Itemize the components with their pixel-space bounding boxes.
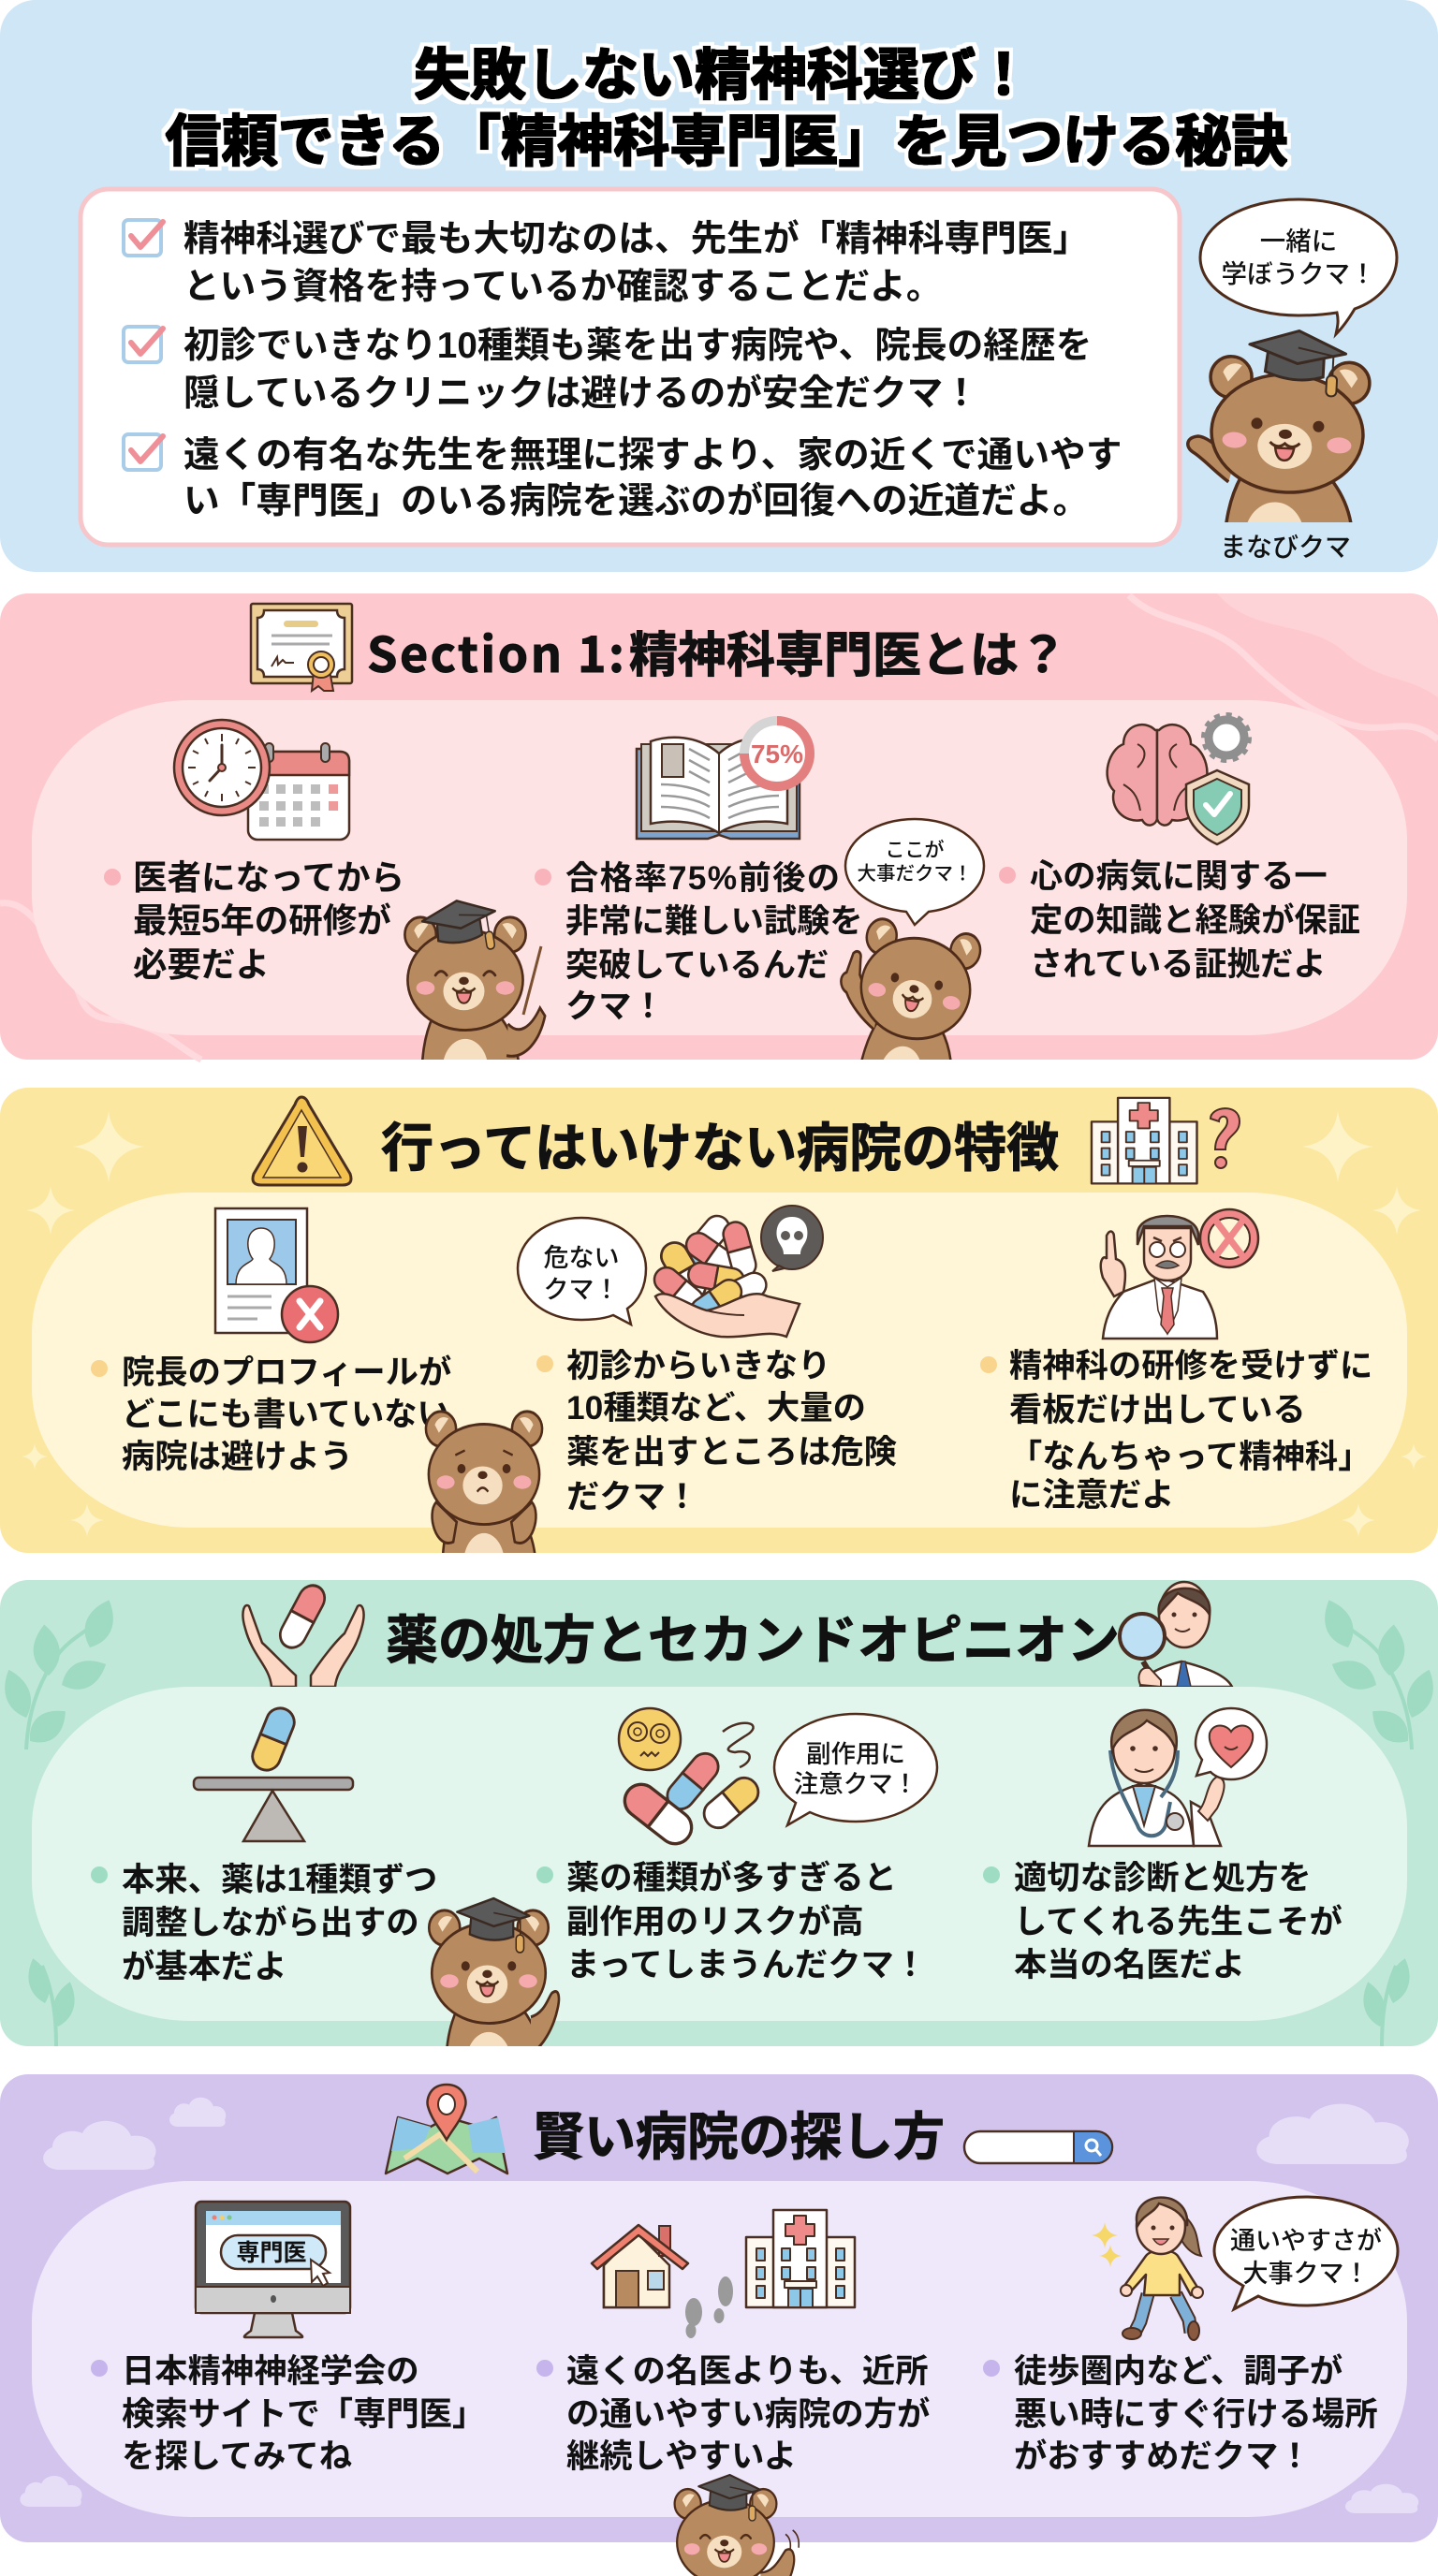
- summary text: [183, 219, 1122, 521]
- text: item 2: 初診からいきなり: [566, 1348, 830, 1384]
- text: item 2: [535, 860, 863, 1025]
- text: item 2: 突破しているんだ: [565, 947, 829, 984]
- text: item 1: 調整しながら出すの: [122, 1905, 419, 1941]
- text: item 2: 薬を出すところは危険: [566, 1434, 897, 1471]
- text: item 3: [983, 2353, 1378, 2475]
- speech bubble: 危ないクマ: クマ！: [543, 1276, 620, 1304]
- text: item 1: 日本精神神経学会の: [122, 2353, 419, 2390]
- text: item 3: 悪い時にすぐ行ける場所: [1014, 2396, 1378, 2433]
- icon: check 1: [124, 220, 163, 256]
- icon: book with 75% ring: [637, 720, 811, 839]
- panel: how to find a hospital: [0, 2074, 1438, 2576]
- text: item 1: [104, 858, 404, 984]
- text: item 3: [999, 858, 1360, 983]
- sparkles: [22, 1111, 1427, 1537]
- text: item 1: 本来、薬は1種類ずつ: [122, 1862, 437, 1898]
- text: item 3: 看板だけ出している: [1009, 1392, 1306, 1428]
- panel: intro: [0, 0, 1438, 578]
- heading: hospitals to avoid: 行ってはいけない病院の特徴: [381, 1119, 1059, 1178]
- icon: hands with capsule: [242, 1581, 364, 1687]
- panel: section 1: [0, 593, 1438, 1062]
- speech bubble: 一緒に学ぼうクマ: 一緒に: [1260, 227, 1337, 256]
- speech bubble: 副作用に注意クマ: [774, 1714, 937, 1825]
- text: item 1: を探してみてね: [122, 2438, 352, 2475]
- icon: profile with x: [215, 1208, 338, 1342]
- text: item 2: 10種類など、大量の: [566, 1390, 866, 1427]
- speech bubble: 危ないクマ: 危ない: [543, 1244, 620, 1272]
- bear name: まなびクマ: [1220, 533, 1351, 562]
- icon: warning: [253, 1097, 351, 1185]
- icon: book with 75% ring: 75%: [751, 739, 803, 768]
- summary text: 初診でいきなり10種類も薬を出す病院や、院長の経歴を: [183, 326, 1092, 366]
- speech bubble: 一緒に学ぼうクマ: [1200, 199, 1397, 334]
- text: item 2: [536, 2353, 930, 2475]
- icon: check 2: [124, 327, 163, 362]
- summary text: 精神科選びで最も大切なのは、先生が「精神科専門医」: [183, 219, 1089, 259]
- icon: dizzy face and pills: [618, 1708, 764, 1851]
- text: item 2: [536, 1348, 897, 1515]
- icon: pills in hand with skull: [650, 1206, 823, 1337]
- text: item 3: 定の知識と経験が保証: [1030, 902, 1360, 939]
- text: item 3: 本当の名医だよ: [1014, 1947, 1245, 1983]
- text: item 2: 合格率75%前後の: [565, 860, 840, 897]
- text: item 3: 「なんちゃって精神科」: [1009, 1439, 1372, 1475]
- text: item 1: 検索サイトで「専門医」: [122, 2396, 485, 2433]
- text: item 3: に注意だよ: [1009, 1477, 1174, 1514]
- icon: doctor and cross: [1101, 1209, 1258, 1339]
- text: item 3: 徒歩圏内など、調子が: [1014, 2353, 1343, 2390]
- title: [166, 44, 1287, 173]
- heading: find hospital: 賢い病院の探し方: [533, 2108, 945, 2166]
- text: item 1: 医者になってから: [133, 858, 404, 897]
- icon: clock and calendar: [174, 720, 349, 840]
- bear: worried: [425, 1410, 543, 1553]
- text: item 2: 遠くの名医よりも、近所: [566, 2353, 929, 2390]
- text: item 3: 適切な診断と処方を: [1014, 1860, 1312, 1896]
- summary text: 遠くの有名な先生を無理に探すより、家の近くで通いやす: [183, 435, 1122, 476]
- clouds: [20, 2098, 1418, 2513]
- title: 信頼できる「精神科専門医」を見つける秘訣: [166, 110, 1287, 173]
- text: item 2: だクマ！: [566, 1479, 698, 1515]
- icon: monitor with 専門医 button: 専門医: [236, 2240, 307, 2266]
- icon: doctor with magnifier: [1120, 1582, 1232, 1687]
- text: item 3: [980, 1348, 1372, 1514]
- bear: manabi kuma: [1186, 329, 1372, 522]
- icon: walking girl: [1092, 2198, 1203, 2340]
- heading: prescription: 薬の処方とセカンドオピニオン: [386, 1611, 1120, 1670]
- icon: balance with capsule: [194, 1704, 353, 1841]
- title: 失敗しない精神科選び！: [414, 44, 1032, 107]
- summary box: [81, 189, 1180, 545]
- panel: prescription and second opinion: [0, 1580, 1438, 2093]
- icon: check 3: [124, 434, 163, 470]
- text: item 1: [91, 1862, 437, 1985]
- text: item 1: 病院は避けよう: [122, 1439, 353, 1475]
- leaves: [0, 1595, 1438, 2046]
- text: item 3: 心の病気に関する一: [1030, 858, 1328, 895]
- text: item 2: の通いやすい病院の方が: [566, 2396, 930, 2433]
- text: item 2: 副作用のリスクが高: [566, 1904, 864, 1940]
- heading: section 1: 精神科専門医とは？: [629, 629, 1067, 683]
- speech bubble: 通いやすさが大事クマ: 通いやすさが: [1230, 2227, 1382, 2255]
- speech bubble: 副作用に注意クマ: 注意クマ！: [794, 1770, 917, 1798]
- text: item 1: が基本だよ: [122, 1949, 286, 1985]
- panel: hospitals to avoid: [0, 1088, 1438, 1593]
- text: item 1: [91, 2353, 485, 2475]
- text: item 3: してくれる先生こそが: [1014, 1904, 1343, 1940]
- text: item 1: [91, 1354, 451, 1475]
- text: item 3: されている証拠だよ: [1030, 946, 1327, 983]
- text: item 2: まってしまうんだクマ！: [566, 1947, 927, 1983]
- bear: cheerful: [675, 2475, 799, 2576]
- icon: brain, gear and shield: [1108, 715, 1249, 844]
- icon: hospital with question mark: [1092, 1098, 1240, 1183]
- text: item 2: 薬の種類が多すぎると: [566, 1860, 897, 1896]
- icon: house, footprints and hospital: [592, 2210, 855, 2338]
- text: item 3: がおすすめだクマ！: [1014, 2438, 1312, 2475]
- icon: doctor with heart: [1089, 1708, 1267, 1846]
- text: item 2: 非常に難しい試験を: [565, 903, 863, 940]
- text: item 2: クマ！: [565, 988, 665, 1025]
- speech bubble: ここが大事だクマ: [845, 819, 984, 925]
- speech bubble: 通いやすさが大事クマ: [1214, 2197, 1398, 2309]
- text: item 1: 最短5年の研修が: [133, 901, 391, 940]
- summary text: い「専門医」のいる病院を選ぶのが回復への近道だよ。: [183, 481, 1089, 521]
- speech bubble: ここが大事だクマ: ここが: [886, 840, 944, 861]
- bear: teacher: [404, 900, 547, 1060]
- text: item 2: [536, 1860, 927, 1983]
- summary text: という資格を持っているか確認することだよ。: [183, 267, 943, 307]
- heading: section 1: Section 1:: [367, 616, 626, 686]
- icon: search bar: [964, 2131, 1112, 2163]
- text: item 1: どこにも書いていない: [122, 1397, 450, 1433]
- icon: map with pin: [386, 2085, 507, 2174]
- text: item 3: 精神科の研修を受けずに: [1009, 1348, 1372, 1384]
- bear: pointing: [840, 917, 981, 1060]
- speech bubble: 通いやすさが大事クマ: 大事クマ！: [1243, 2260, 1369, 2288]
- icon: monitor with 専門医 button: [196, 2202, 350, 2337]
- speech bubble: 危ないクマ: [518, 1218, 646, 1325]
- speech bubble: 副作用に注意クマ: 副作用に: [806, 1740, 905, 1768]
- speech bubble: ここが大事だクマ: 大事だクマ！: [858, 863, 972, 885]
- speech bubble: 一緒に学ぼうクマ: 学ぼうクマ！: [1221, 259, 1376, 288]
- icon: certificate: [251, 604, 352, 691]
- text: item 3: [983, 1860, 1343, 1983]
- waves: [0, 595, 1438, 1060]
- text: item 2: 継続しやすいよ: [566, 2438, 797, 2475]
- text: item 1: 必要だよ: [133, 945, 270, 984]
- bear: waving: [427, 1896, 560, 2046]
- text: item 1: 院長のプロフィールが: [122, 1354, 451, 1391]
- summary text: 隠しているクリニックは避けるのが安全だクマ！: [183, 373, 979, 414]
